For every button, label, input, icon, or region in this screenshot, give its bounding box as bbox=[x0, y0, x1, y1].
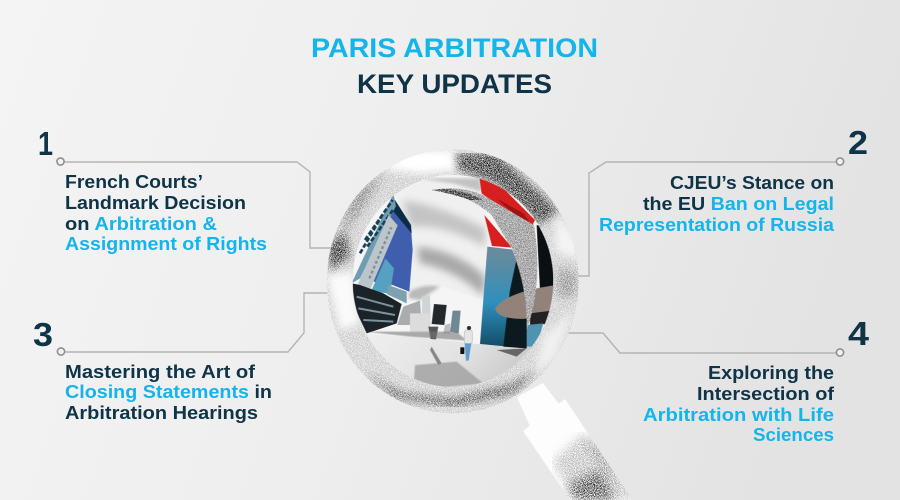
text block 3 bbox=[65, 361, 272, 423]
ground bbox=[372, 335, 532, 387]
right tower bbox=[480, 247, 527, 348]
number 2: 2 bbox=[848, 124, 868, 161]
text block 1: Landmark Decision bbox=[65, 192, 246, 213]
flag: red band bbox=[479, 178, 536, 224]
rim shard over photo bbox=[484, 196, 537, 330]
text block 4: Intersection of bbox=[697, 383, 835, 404]
text block 3: Mastering the Art of bbox=[65, 361, 256, 382]
flag: white band bbox=[395, 177, 487, 300]
text block 1: French Courts’ bbox=[65, 171, 203, 192]
number 1: 1 bbox=[38, 125, 53, 162]
text block 1: on Arbitration & bbox=[65, 213, 217, 234]
saucer building and right tower bbox=[537, 225, 553, 290]
text block 2: the EU Ban on Legal bbox=[643, 193, 834, 214]
number 4: 4 bbox=[848, 315, 870, 352]
flag: blue band bbox=[373, 205, 413, 292]
title bbox=[311, 33, 598, 99]
text block 2: CJEU’s Stance on bbox=[670, 172, 834, 193]
text block 2: Representation of Russia bbox=[599, 214, 835, 235]
lens rim bbox=[326, 149, 580, 414]
text block 4 bbox=[643, 362, 835, 445]
icon: magnifying glass lens bbox=[326, 149, 580, 414]
title: KEY UPDATES bbox=[357, 69, 552, 99]
connector line 4 bbox=[565, 333, 844, 356]
text block 4: Exploring the bbox=[708, 362, 834, 383]
text block 4: Sciences bbox=[753, 424, 834, 445]
text block 1 bbox=[65, 171, 267, 254]
skyline bbox=[397, 301, 422, 325]
left towers bbox=[352, 193, 396, 283]
number 3: 3 bbox=[33, 316, 53, 353]
text block 3: Closing Statements in bbox=[65, 381, 272, 402]
text block 3: Arbitration Hearings bbox=[65, 402, 258, 423]
city photograph with flag bbox=[350, 173, 557, 393]
connector line 3 bbox=[57, 293, 335, 355]
text block 1: Assignment of Rights bbox=[65, 233, 267, 254]
connector line 2 bbox=[570, 158, 844, 276]
person walking bbox=[460, 326, 472, 361]
icon: magnifying glass handle bbox=[517, 383, 640, 500]
text block 4: Arbitration with Life bbox=[643, 404, 834, 425]
text block 2 bbox=[599, 172, 835, 235]
connector line 1 bbox=[57, 158, 335, 248]
title: PARIS ARBITRATION bbox=[311, 33, 598, 63]
